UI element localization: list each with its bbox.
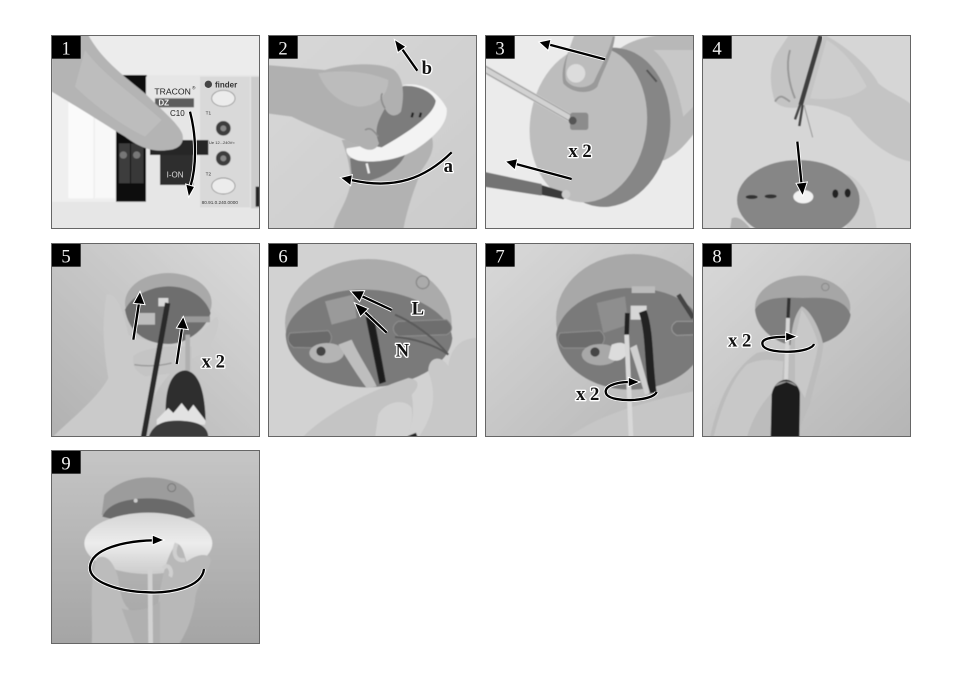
step number 2 <box>269 36 298 60</box>
label L: L <box>412 298 424 319</box>
multiplier x 2: x 2 <box>568 141 592 162</box>
step number 3: 3 <box>495 39 505 60</box>
arrow: neutral terminal <box>354 303 387 333</box>
arrow: lower cable direction <box>505 159 572 179</box>
multiplier x 2: x 2 <box>728 331 751 352</box>
step number 8: 8 <box>712 247 722 268</box>
step number 4 <box>703 36 732 60</box>
arrow a: rotate <box>340 152 452 186</box>
arrow: left screw <box>133 291 145 340</box>
wires held in hand <box>795 36 821 137</box>
rotation arrow <box>762 332 814 352</box>
breaker labels: T1 <box>206 111 212 116</box>
step number 5: 5 <box>61 247 71 268</box>
photo: base with cables and hand <box>480 30 700 233</box>
breaker labels: C10 <box>170 109 185 118</box>
label a: a <box>444 156 454 177</box>
panel 5: screw base to ceiling <box>51 243 260 437</box>
breaker labels: Ue 12...240V≈ <box>209 140 235 145</box>
panel 1: switch off the breaker <box>51 35 260 229</box>
panel 3: insert cable through gland <box>485 35 694 229</box>
step number 1: 1 <box>61 39 71 60</box>
step number 9 <box>52 451 81 475</box>
breaker labels: finder <box>215 80 237 89</box>
panel 9: attach the dome cover <box>51 450 260 644</box>
rotation arrow <box>606 377 657 400</box>
label b: b <box>422 58 432 79</box>
step number 5 <box>52 244 81 268</box>
arrow: right screw <box>176 316 188 364</box>
photo: open base with terminals and fingers <box>265 238 482 441</box>
photo: hands twisting lid <box>265 30 482 233</box>
step number 8 <box>703 244 732 268</box>
step number 6: 6 <box>278 247 288 268</box>
multiplier x 2: x 2 <box>202 351 225 372</box>
breaker labels: 80.91.0.240.0000 <box>202 200 238 205</box>
breaker labels: DZ <box>158 99 169 108</box>
photo: dome, base and hands <box>48 445 265 648</box>
photo: base, hand and screwdriver <box>700 238 917 441</box>
label N: N <box>396 341 410 362</box>
panel 7: tighten terminal screws <box>485 243 694 437</box>
step number 3 <box>486 36 515 60</box>
multiplier x 2: x 2 <box>576 384 599 405</box>
step number 1 <box>52 36 81 60</box>
rotation arrow <box>90 535 204 592</box>
panel 6: connect live and neutral <box>268 243 477 437</box>
step number 9: 9 <box>61 454 71 475</box>
breaker labels: I-ON <box>167 171 184 180</box>
panel 4: feed wires through the hole <box>702 35 911 229</box>
panel 8: fix the cover screws <box>702 243 911 437</box>
arrow: live terminal <box>350 291 392 310</box>
arrow: down into hole <box>796 142 807 196</box>
panel 2: remove the cover <box>268 35 477 229</box>
step number 2: 2 <box>278 39 288 60</box>
step number 6 <box>269 244 298 268</box>
breaker labels: T2 <box>206 171 212 176</box>
arrow: switch down <box>186 112 195 197</box>
photo: finger on circuit breaker <box>45 30 265 230</box>
step number 7: 7 <box>495 247 505 268</box>
breaker labels <box>154 80 238 205</box>
arrow b: lift off <box>394 39 417 71</box>
photo: hand, wires and base <box>700 30 917 240</box>
step number 4: 4 <box>712 39 722 60</box>
arrow: upper cable direction <box>539 39 605 59</box>
breaker labels: ® <box>192 84 196 90</box>
photo: base, hand and drill <box>48 238 265 441</box>
photo: open base with screwdriver <box>480 238 711 441</box>
step number 7 <box>486 244 515 268</box>
breaker labels: TRACON <box>154 86 191 96</box>
